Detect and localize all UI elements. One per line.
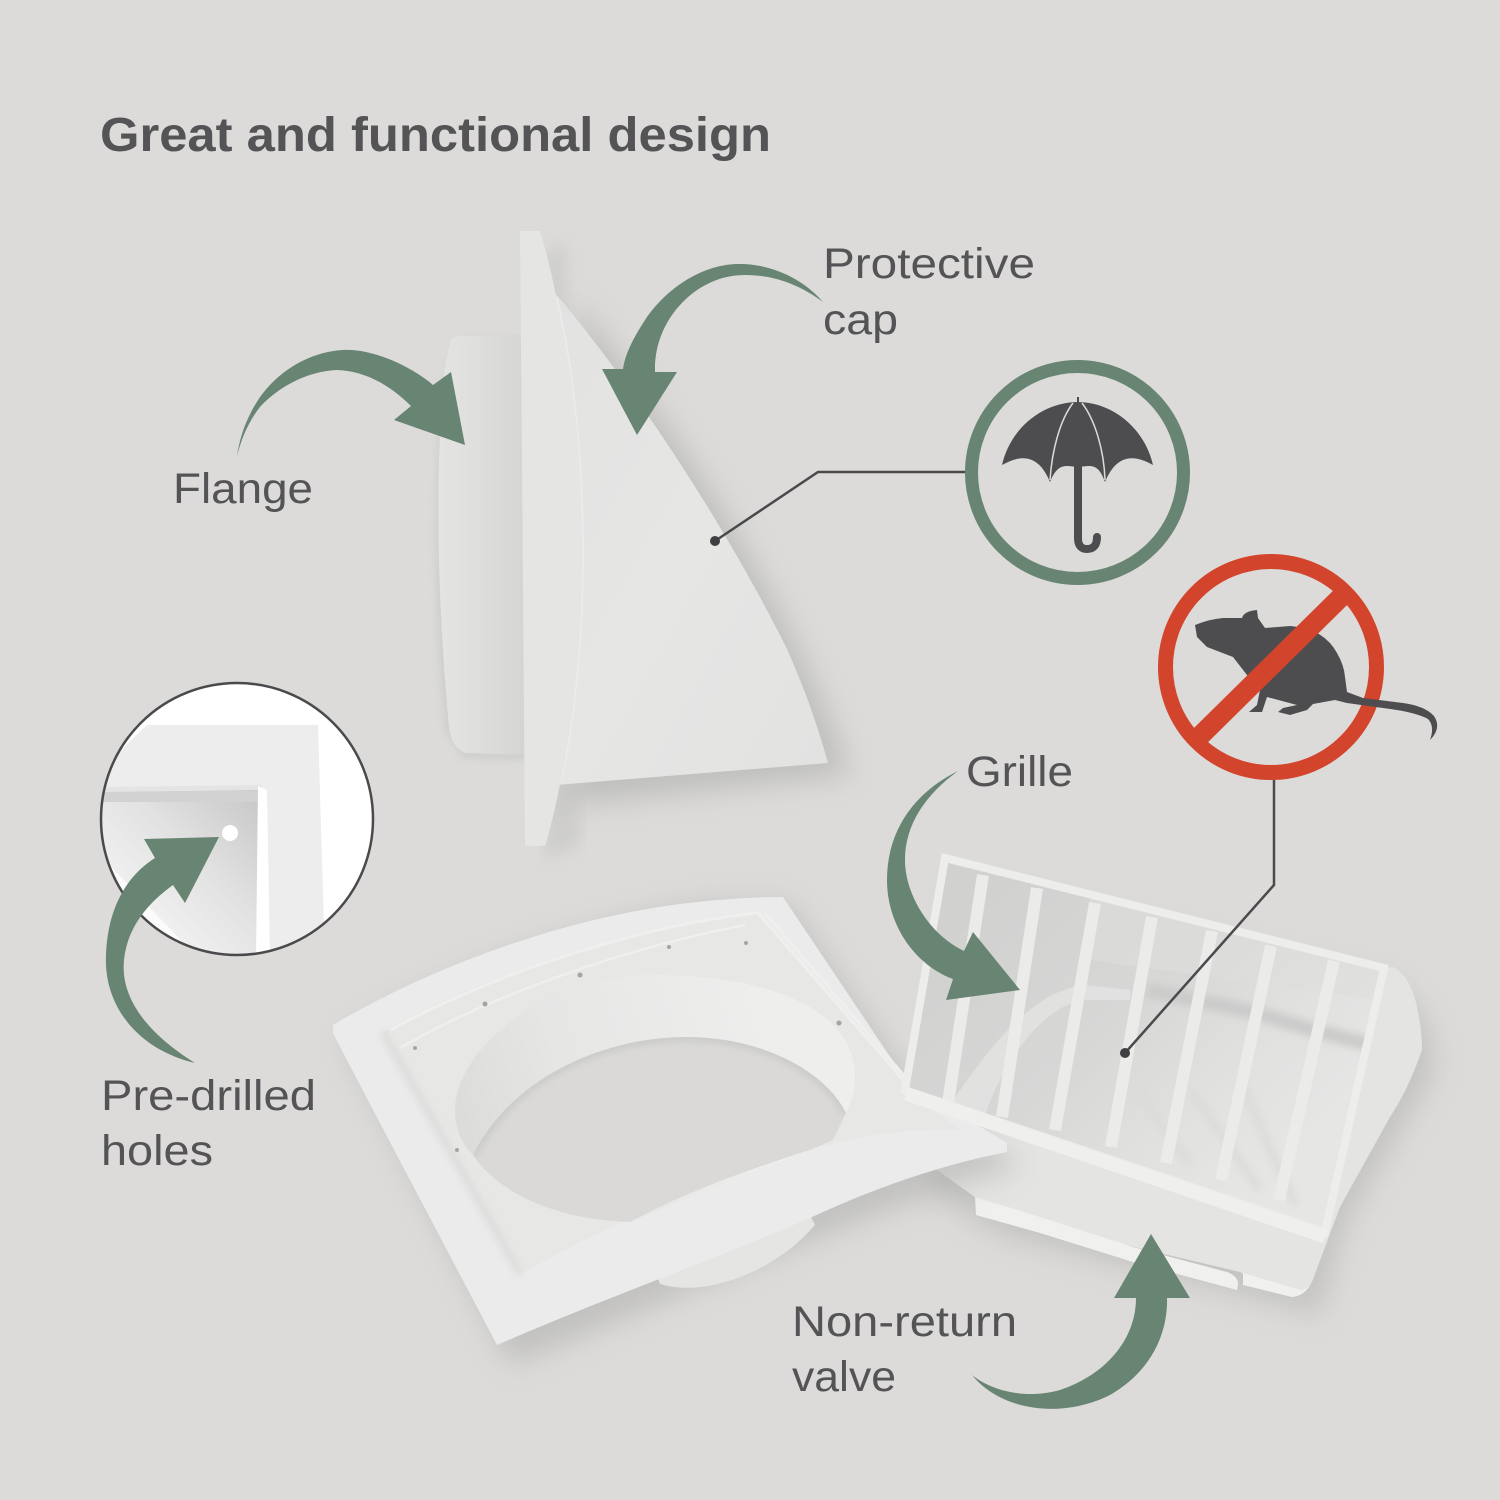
- label: Protective cap: Protective: [823, 240, 1035, 288]
- product: flange frame with duct ring: [333, 897, 1015, 1365]
- inset: pre-drilled hole detail: [100, 683, 373, 960]
- arrow: non-return valve: [972, 1234, 1190, 1409]
- title: Great and functional design: [100, 109, 771, 162]
- icon: no rodents sign: [1166, 562, 1437, 772]
- label: Protective cap: [823, 240, 1035, 344]
- leader line: protective cap to umbrella: [710, 472, 966, 546]
- product: valve housing and plate: [905, 890, 1434, 1315]
- label: Non-return valve: valve: [792, 1353, 896, 1401]
- label: Pre-drilled holes: holes: [101, 1127, 213, 1175]
- label: Pre-drilled holes: [101, 1072, 316, 1175]
- product: vent cap side view: [436, 231, 850, 860]
- label: Non-return valve: Non-return: [792, 1298, 1017, 1346]
- label: Protective cap: cap: [823, 296, 898, 344]
- label: Grille: Grille: [966, 748, 1073, 796]
- arrow: pre-drilled holes: [106, 837, 219, 1063]
- product: grille: [905, 858, 1384, 1237]
- label: Pre-drilled holes: Pre-drilled: [101, 1072, 316, 1120]
- label: Non-return valve: [792, 1298, 1017, 1401]
- label: Flange: Flange: [173, 465, 313, 513]
- arrow: grille: [887, 771, 1020, 1000]
- infographic canvas: [100, 116, 1438, 1409]
- arrow: protective cap: [602, 264, 823, 435]
- leader line: grille to rodent sign: [1120, 780, 1274, 1058]
- arrow: flange: [237, 350, 465, 456]
- icon: umbrella in green ring: [972, 366, 1184, 578]
